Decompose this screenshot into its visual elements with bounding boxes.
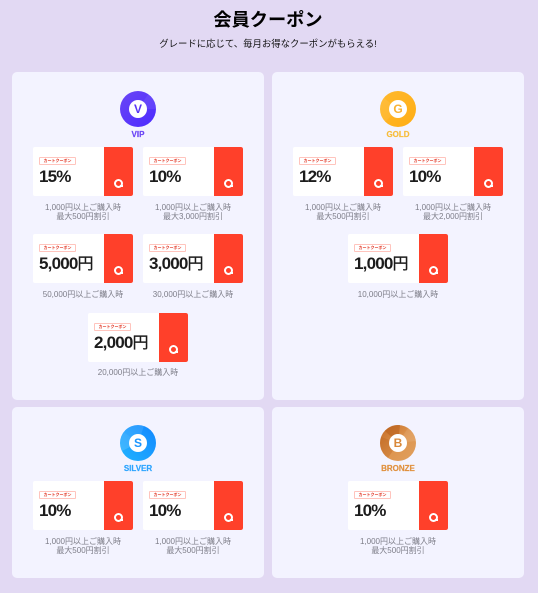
coupon: 10%: カートクーポン [154, 158, 182, 163]
coupon: 15% [33, 147, 133, 196]
panel: BRONZE [272, 407, 524, 578]
icon: VIP badge [120, 91, 156, 127]
coupon note: 30,000円以上ご購入時 [153, 290, 233, 299]
coupon note: 1,000円以上ご購入時 [360, 537, 436, 546]
label: VIP: VIP [132, 130, 144, 139]
coupon: 10% [348, 481, 448, 530]
coupon note [360, 537, 436, 555]
coupon: 2,000円: カートクーポン [98, 324, 126, 329]
coupon: 10%: 10% [39, 501, 71, 520]
coupon note: 最大500円割引 [56, 546, 110, 555]
coupon: 3,000円 [143, 234, 243, 283]
coupon: 15%: 15% [39, 167, 71, 186]
panel: SILVER [12, 407, 264, 578]
coupon note [305, 203, 381, 221]
coupon note: 最大500円割引 [166, 546, 220, 555]
coupon note: 最大500円割引 [316, 212, 370, 221]
coupon: 10%: 10% [149, 501, 181, 520]
coupon: 5,000円 [33, 234, 133, 283]
coupon note: 10,000円以上ご購入時 [358, 290, 438, 299]
coupon note [45, 203, 121, 221]
coupon: 10% [143, 481, 243, 530]
coupon note: 20,000円以上ご購入時 [98, 368, 178, 377]
coupon: 15%: カートクーポン [44, 158, 72, 163]
icon: BRONZE badge [380, 425, 416, 461]
coupon: 2,000円 [88, 313, 188, 362]
coupon note [155, 203, 231, 221]
panel: GOLD [272, 72, 524, 400]
coupon: 10%: カートクーポン [414, 158, 442, 163]
coupon: 10%: 10% [409, 167, 441, 186]
coupon: 10% [33, 481, 133, 530]
coupon: 5,000円: 5,000円 [39, 254, 94, 273]
coupon: 10%: カートクーポン [154, 492, 182, 497]
label: SILVER: SILVER [124, 464, 152, 473]
coupon: 1,000円 [348, 234, 448, 283]
icon: GOLD badge [380, 91, 416, 127]
coupon: 10%: 10% [354, 501, 386, 520]
coupon note: 1,000円以上ご購入時 [155, 203, 231, 212]
coupon note: 1,000円以上ご購入時 [45, 537, 121, 546]
coupon: 3,000円: 3,000円 [149, 254, 204, 273]
coupon note: 最大500円割引 [56, 212, 110, 221]
icon: SILVER badge: S [134, 436, 142, 450]
icon: VIP badge: V [134, 102, 142, 116]
panel: VIP [12, 72, 264, 400]
coupon note: 最大2,000円割引 [423, 212, 483, 221]
coupon: 1,000円: 1,000円 [354, 254, 409, 273]
icon: SILVER badge [120, 425, 156, 461]
coupon note: 1,000円以上ご購入時 [305, 203, 381, 212]
title: 会員クーポン [213, 10, 323, 30]
coupon note [155, 537, 231, 555]
coupon: 3,000円: カートクーポン [154, 245, 182, 250]
coupon: 10%: カートクーポン [44, 492, 72, 497]
coupon note [415, 203, 491, 221]
icon: BRONZE badge: B [394, 436, 403, 450]
icon: GOLD badge: G [393, 102, 403, 116]
coupon: 2,000円: 2,000円 [94, 333, 149, 352]
coupon: 10% [143, 147, 243, 196]
coupon: 12%: カートクーポン [304, 158, 332, 163]
label: GOLD: GOLD [386, 130, 410, 139]
coupon: 10%: 10% [149, 167, 181, 186]
label: BRONZE: BRONZE [381, 464, 415, 473]
coupon: 1,000円: カートクーポン [358, 245, 386, 250]
coupon note: 1,000円以上ご購入時 [155, 537, 231, 546]
coupon note [45, 537, 121, 555]
coupon note: 1,000円以上ご購入時 [415, 203, 491, 212]
coupon: 12% [293, 147, 393, 196]
coupon: 10%: カートクーポン [358, 492, 386, 497]
coupon note: 最大3,000円割引 [163, 212, 223, 221]
coupon: 12%: 12% [299, 167, 331, 186]
coupon: 5,000円: カートクーポン [44, 245, 72, 250]
subtitle: グレードに応じて、毎月お得なクーポンがもらえる! [159, 38, 377, 49]
coupon note: 1,000円以上ご購入時 [45, 203, 121, 212]
coupon note: 最大500円割引 [371, 546, 425, 555]
coupon note: 50,000円以上ご購入時 [43, 290, 123, 299]
coupon: 10% [403, 147, 503, 196]
